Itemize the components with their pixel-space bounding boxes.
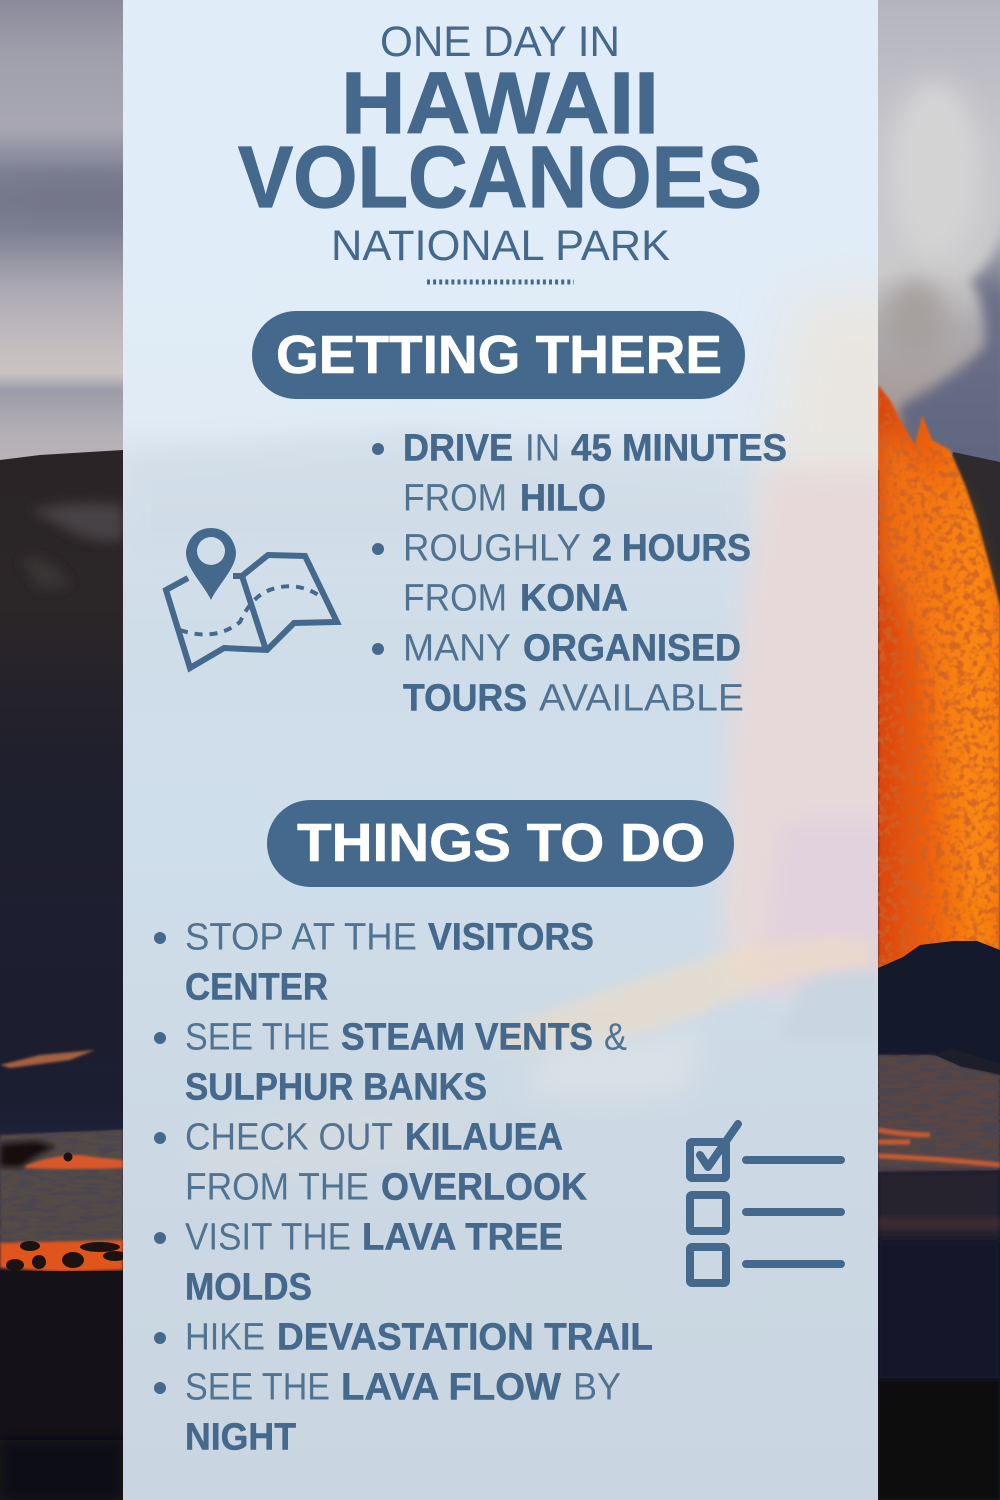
heading pill: getting there: GETTING THERE (276, 325, 722, 385)
list: getting there (372, 428, 787, 720)
list: things to do: FROM THE (185, 1166, 369, 1208)
list: getting there: DRIVE (403, 428, 513, 470)
list: things to do: SEE THE (185, 1366, 330, 1408)
heading pill: things to do: THINGS TO DO (297, 813, 705, 873)
list: getting there: 45 MINUTES (571, 428, 787, 470)
list: things to do: OVERLOOK (381, 1166, 588, 1208)
list: things to do: SEE THE (185, 1016, 330, 1058)
list: things to do: LAVA FLOW (341, 1366, 561, 1408)
list: things to do: STOP AT THE (185, 916, 417, 958)
list: things to do: DEVASTATION TRAIL (277, 1316, 653, 1358)
list: getting there: KONA (520, 578, 628, 620)
list: things to do: HIKE (185, 1316, 265, 1358)
list: things to do: SULPHUR BANKS (185, 1066, 487, 1108)
title: ONE DAY IN (380, 18, 620, 66)
list: things to do: NIGHT (185, 1416, 296, 1458)
list: getting there: AVAILABLE (539, 678, 744, 720)
list: things to do: LAVA TREE (362, 1216, 563, 1258)
list: things to do: MOLDS (185, 1266, 312, 1308)
translucent panel (123, 0, 920, 1500)
list: getting there: IN (525, 428, 560, 470)
heading pill: getting there (252, 311, 745, 399)
list: getting there: FROM (403, 478, 507, 520)
list: things to do: CENTER (185, 966, 328, 1008)
list: getting there: 2 HOURS (592, 528, 751, 570)
list: things to do: CHECK OUT (185, 1116, 393, 1158)
list: things to do (154, 916, 653, 1458)
list: things to do: STEAM VENTS (341, 1016, 593, 1058)
list: getting there: MANY (403, 628, 511, 670)
list: getting there: ORGANISED (523, 628, 741, 670)
list: getting there: FROM (403, 578, 507, 620)
list: things to do: VISITORS (428, 916, 594, 958)
list: things to do: KILAUEA (405, 1116, 563, 1158)
title: VOLCANOES (238, 129, 762, 226)
title: NATIONAL PARK (331, 222, 670, 270)
title: HAWAII (341, 55, 659, 152)
list: getting there: HILO (520, 478, 606, 520)
list: things to do: & (604, 1016, 627, 1058)
icon: map with location pin (166, 528, 337, 668)
heading pill: things to do (267, 800, 734, 887)
list: getting there: TOURS (403, 678, 527, 720)
list: getting there: ROUGHLY (403, 528, 581, 570)
icon: checklist (690, 1124, 841, 1283)
list: things to do: BY (573, 1366, 621, 1408)
list: things to do: VISIT THE (185, 1216, 351, 1258)
title (238, 18, 762, 270)
